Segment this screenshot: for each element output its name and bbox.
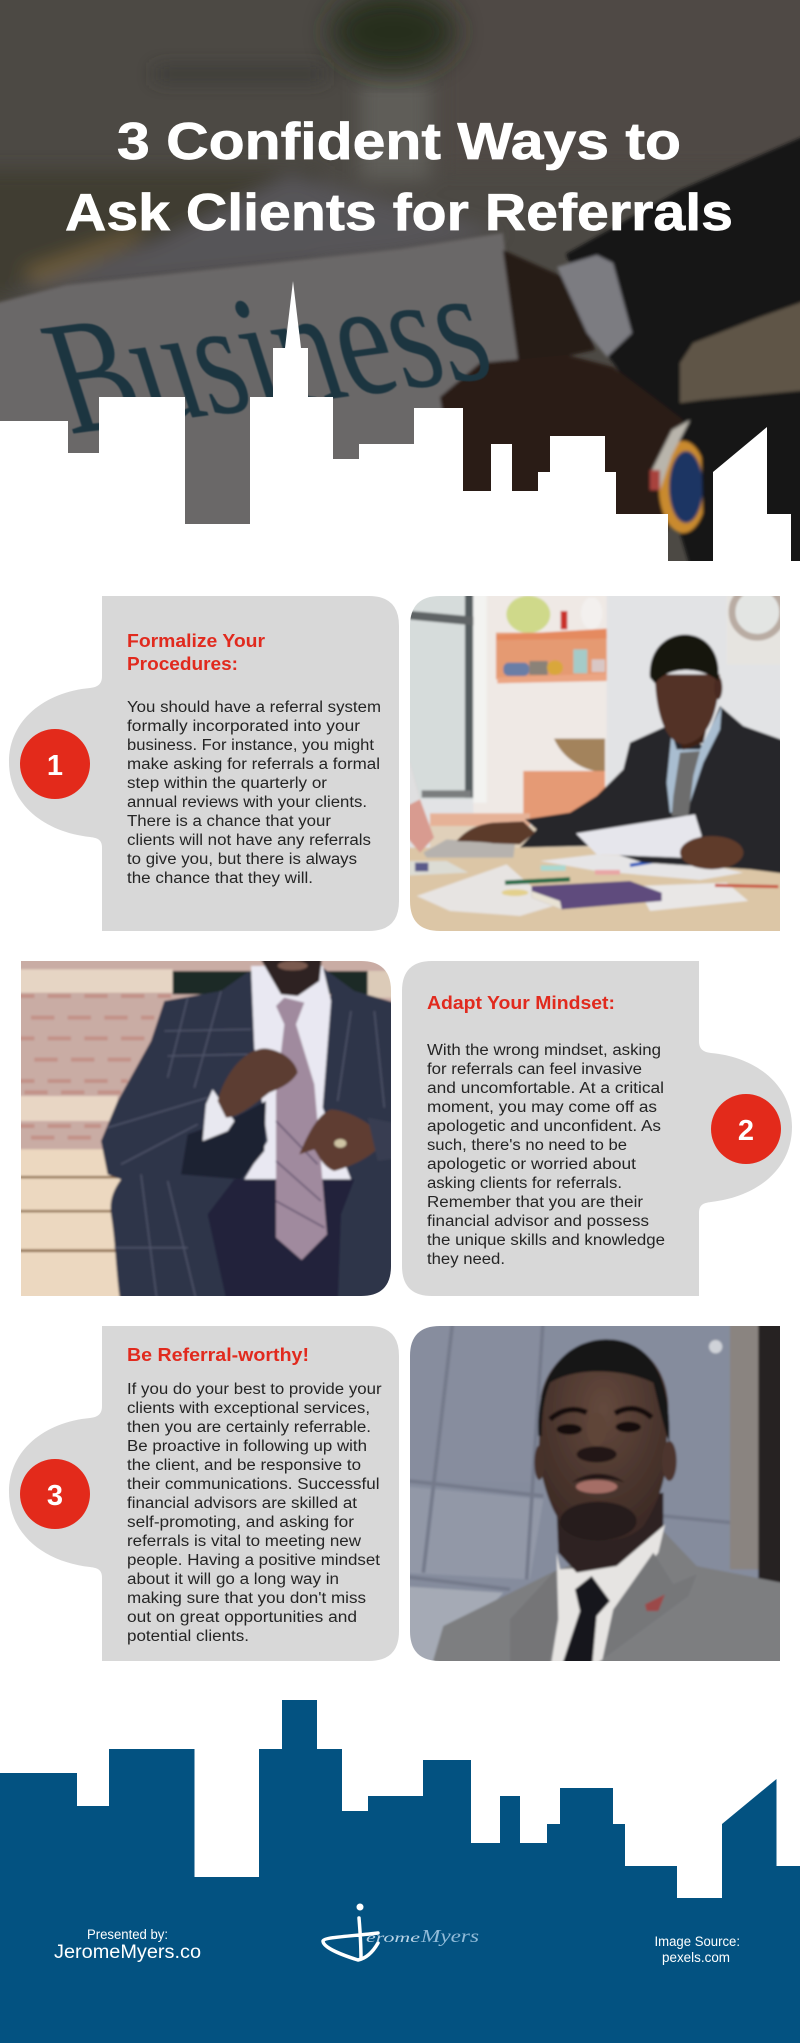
body text 2: for referrals can feel invasive (427, 1061, 642, 1078)
heading 3: Be Referral-worthy! (127, 1345, 309, 1365)
body text 3: potential clients. (127, 1628, 249, 1645)
body text 3: If you do your best to provide your (127, 1381, 382, 1398)
title: 3 Confident Ways to (117, 113, 681, 171)
body text 2: apologetic or worried about (427, 1156, 637, 1173)
number badge 3 (20, 1459, 90, 1529)
number badge 2: 2 (738, 1115, 754, 1147)
body text 1: business. For instance, you might (127, 737, 375, 754)
footer: image source: pexels.com (662, 1950, 730, 1965)
panel: step 2 adapt your mindset (402, 961, 792, 1296)
number badge 1: 1 (47, 750, 63, 782)
body text 2: Remember that you are their (427, 1194, 643, 1211)
footer blue skyline band (0, 1700, 800, 2043)
body text 1: step within the quarterly or (127, 775, 327, 792)
photo: man at desk with laptop and papers (410, 596, 780, 931)
body text 1: formally incorporated into your (127, 718, 360, 735)
body text 3: out on great opportunities and (127, 1609, 357, 1626)
panel 1 background with bump (9, 596, 399, 931)
body text 2: the unique skills and knowledge (427, 1232, 665, 1249)
logo: Jerome Myers signature: erome (366, 1931, 420, 1946)
header photo: hands holding Business newspaper (0, 0, 800, 600)
body text 3: financial advisors are skilled at (127, 1495, 358, 1512)
body text 1: to give you, but there is always (127, 851, 357, 868)
footer: image source (654, 1934, 740, 1965)
body text 3 (127, 1381, 382, 1645)
number badge 1 (20, 729, 90, 799)
heading 1 (127, 631, 265, 674)
footer: presented by: Presented by: (87, 1927, 168, 1942)
body text 2 (427, 1042, 665, 1268)
body text 3: referrals is vital to meeting new (127, 1533, 362, 1550)
body text 1: There is a chance that your (127, 813, 331, 830)
body text 3: their communications. Successful (127, 1476, 380, 1493)
body text 2: they need. (427, 1251, 505, 1268)
body text 1: You should have a referral system (127, 699, 381, 716)
body text 2: such, there's no need to be (427, 1137, 627, 1154)
footer: presented by (54, 1927, 201, 1963)
body text 2: financial advisor and possess (427, 1213, 649, 1230)
title (65, 113, 733, 242)
body text 2: With the wrong mindset, asking (427, 1042, 661, 1059)
body text 3: Be proactive in following up with (127, 1438, 367, 1455)
body text 2: apologetic and unconfident. As (427, 1118, 661, 1135)
body text 2: asking clients for referrals. (427, 1175, 622, 1192)
footer: presented by: JeromeMyers.co (54, 1942, 201, 1963)
body text 1: the chance that they will. (127, 870, 313, 887)
body text 1 (127, 699, 381, 887)
body text 2: and uncomfortable. At a critical (427, 1080, 664, 1097)
photo: portrait of man in grey suit (410, 1326, 780, 1661)
brick rows (11, 996, 171, 1138)
body text 3: clients with exceptional services, (127, 1400, 370, 1417)
body text 2: moment, you may come off as (427, 1099, 657, 1116)
logo: Jerome Myers signature (323, 1904, 479, 1960)
newspaper masthead word: Business (25, 234, 509, 469)
panel: step 1 formalize your procedures (9, 596, 399, 931)
logo: Jerome Myers signature: Myers (420, 1926, 479, 1946)
body text 1: annual reviews with your clients. (127, 794, 367, 811)
heading 1: Formalize Your (127, 631, 265, 651)
footer: image source: Image Source: (654, 1934, 740, 1949)
body text 1: make asking for referrals a formal (127, 756, 380, 773)
heading 2: Adapt Your Mindset: (427, 993, 615, 1013)
header white skyline silhouette (0, 281, 800, 575)
number badge 2 (711, 1094, 781, 1164)
heading 1: Procedures: (127, 654, 238, 674)
title: Ask Clients for Referrals (65, 184, 733, 242)
number badge 3: 3 (47, 1480, 63, 1512)
body text 3: self-promoting, and asking for (127, 1514, 354, 1531)
body text 1: clients will not have any referrals (127, 832, 371, 849)
panel 3 background with bump (9, 1326, 399, 1661)
body text 3: people. Having a positive mindset (127, 1552, 381, 1569)
panel 2 background with bump (402, 961, 792, 1296)
body text 3: making sure that you don't miss (127, 1590, 366, 1607)
body text 3: about it will go a long way in (127, 1571, 339, 1588)
photo: man in plaid suit adjusting tie (21, 961, 391, 1296)
body text 3: then you are certainly referrable. (127, 1419, 371, 1436)
body text 3: the client, and be responsive to (127, 1457, 361, 1474)
panel: step 3 be referral-worthy (9, 1326, 399, 1661)
